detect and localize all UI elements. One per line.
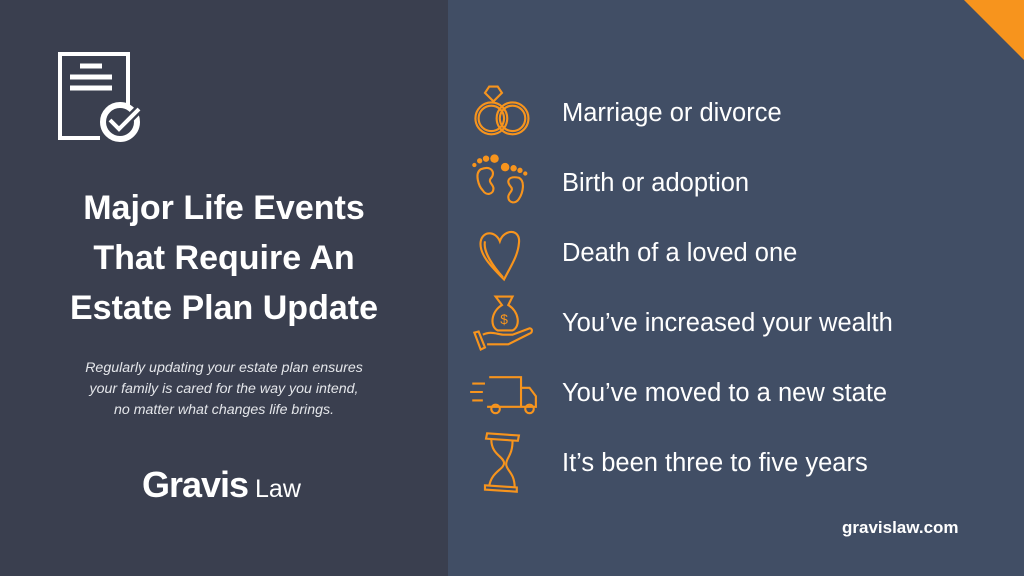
subtitle text: your family is cared for the way you intend, xyxy=(90,381,358,397)
icon: moving truck xyxy=(470,376,537,414)
item: moved: You’ve moved to a new state xyxy=(562,379,887,407)
icon: document with check xyxy=(58,52,140,142)
title: Major Life Events xyxy=(83,189,365,227)
item: death: Death of a loved one xyxy=(562,239,797,267)
item: marriage: Marriage or divorce xyxy=(562,99,782,127)
subtitle text xyxy=(85,360,363,418)
item: years: It’s been three to five years xyxy=(562,449,868,477)
icon: money bag in hand xyxy=(473,296,533,351)
item: wealth: You’ve increased your wealth xyxy=(562,309,893,337)
logo: Gravis Law: Gravis Law xyxy=(142,464,301,505)
website url: gravislaw.com xyxy=(842,518,959,537)
corner triangle accent xyxy=(964,0,1024,60)
title: Estate Plan Update xyxy=(70,289,378,327)
title: That Require An xyxy=(93,239,355,277)
icon: footprints xyxy=(472,154,528,204)
right panel xyxy=(448,0,1024,576)
item: birth: Birth or adoption xyxy=(562,169,749,197)
subtitle text: no matter what changes life brings. xyxy=(114,402,334,418)
left panel xyxy=(0,0,448,576)
title xyxy=(70,189,378,327)
icon: hourglass xyxy=(484,432,520,493)
icon: money bag in hand: $ xyxy=(500,312,508,327)
subtitle text: Regularly updating your estate plan ensures xyxy=(85,360,363,376)
icon: heart xyxy=(479,230,520,282)
icon: rings xyxy=(474,86,530,136)
